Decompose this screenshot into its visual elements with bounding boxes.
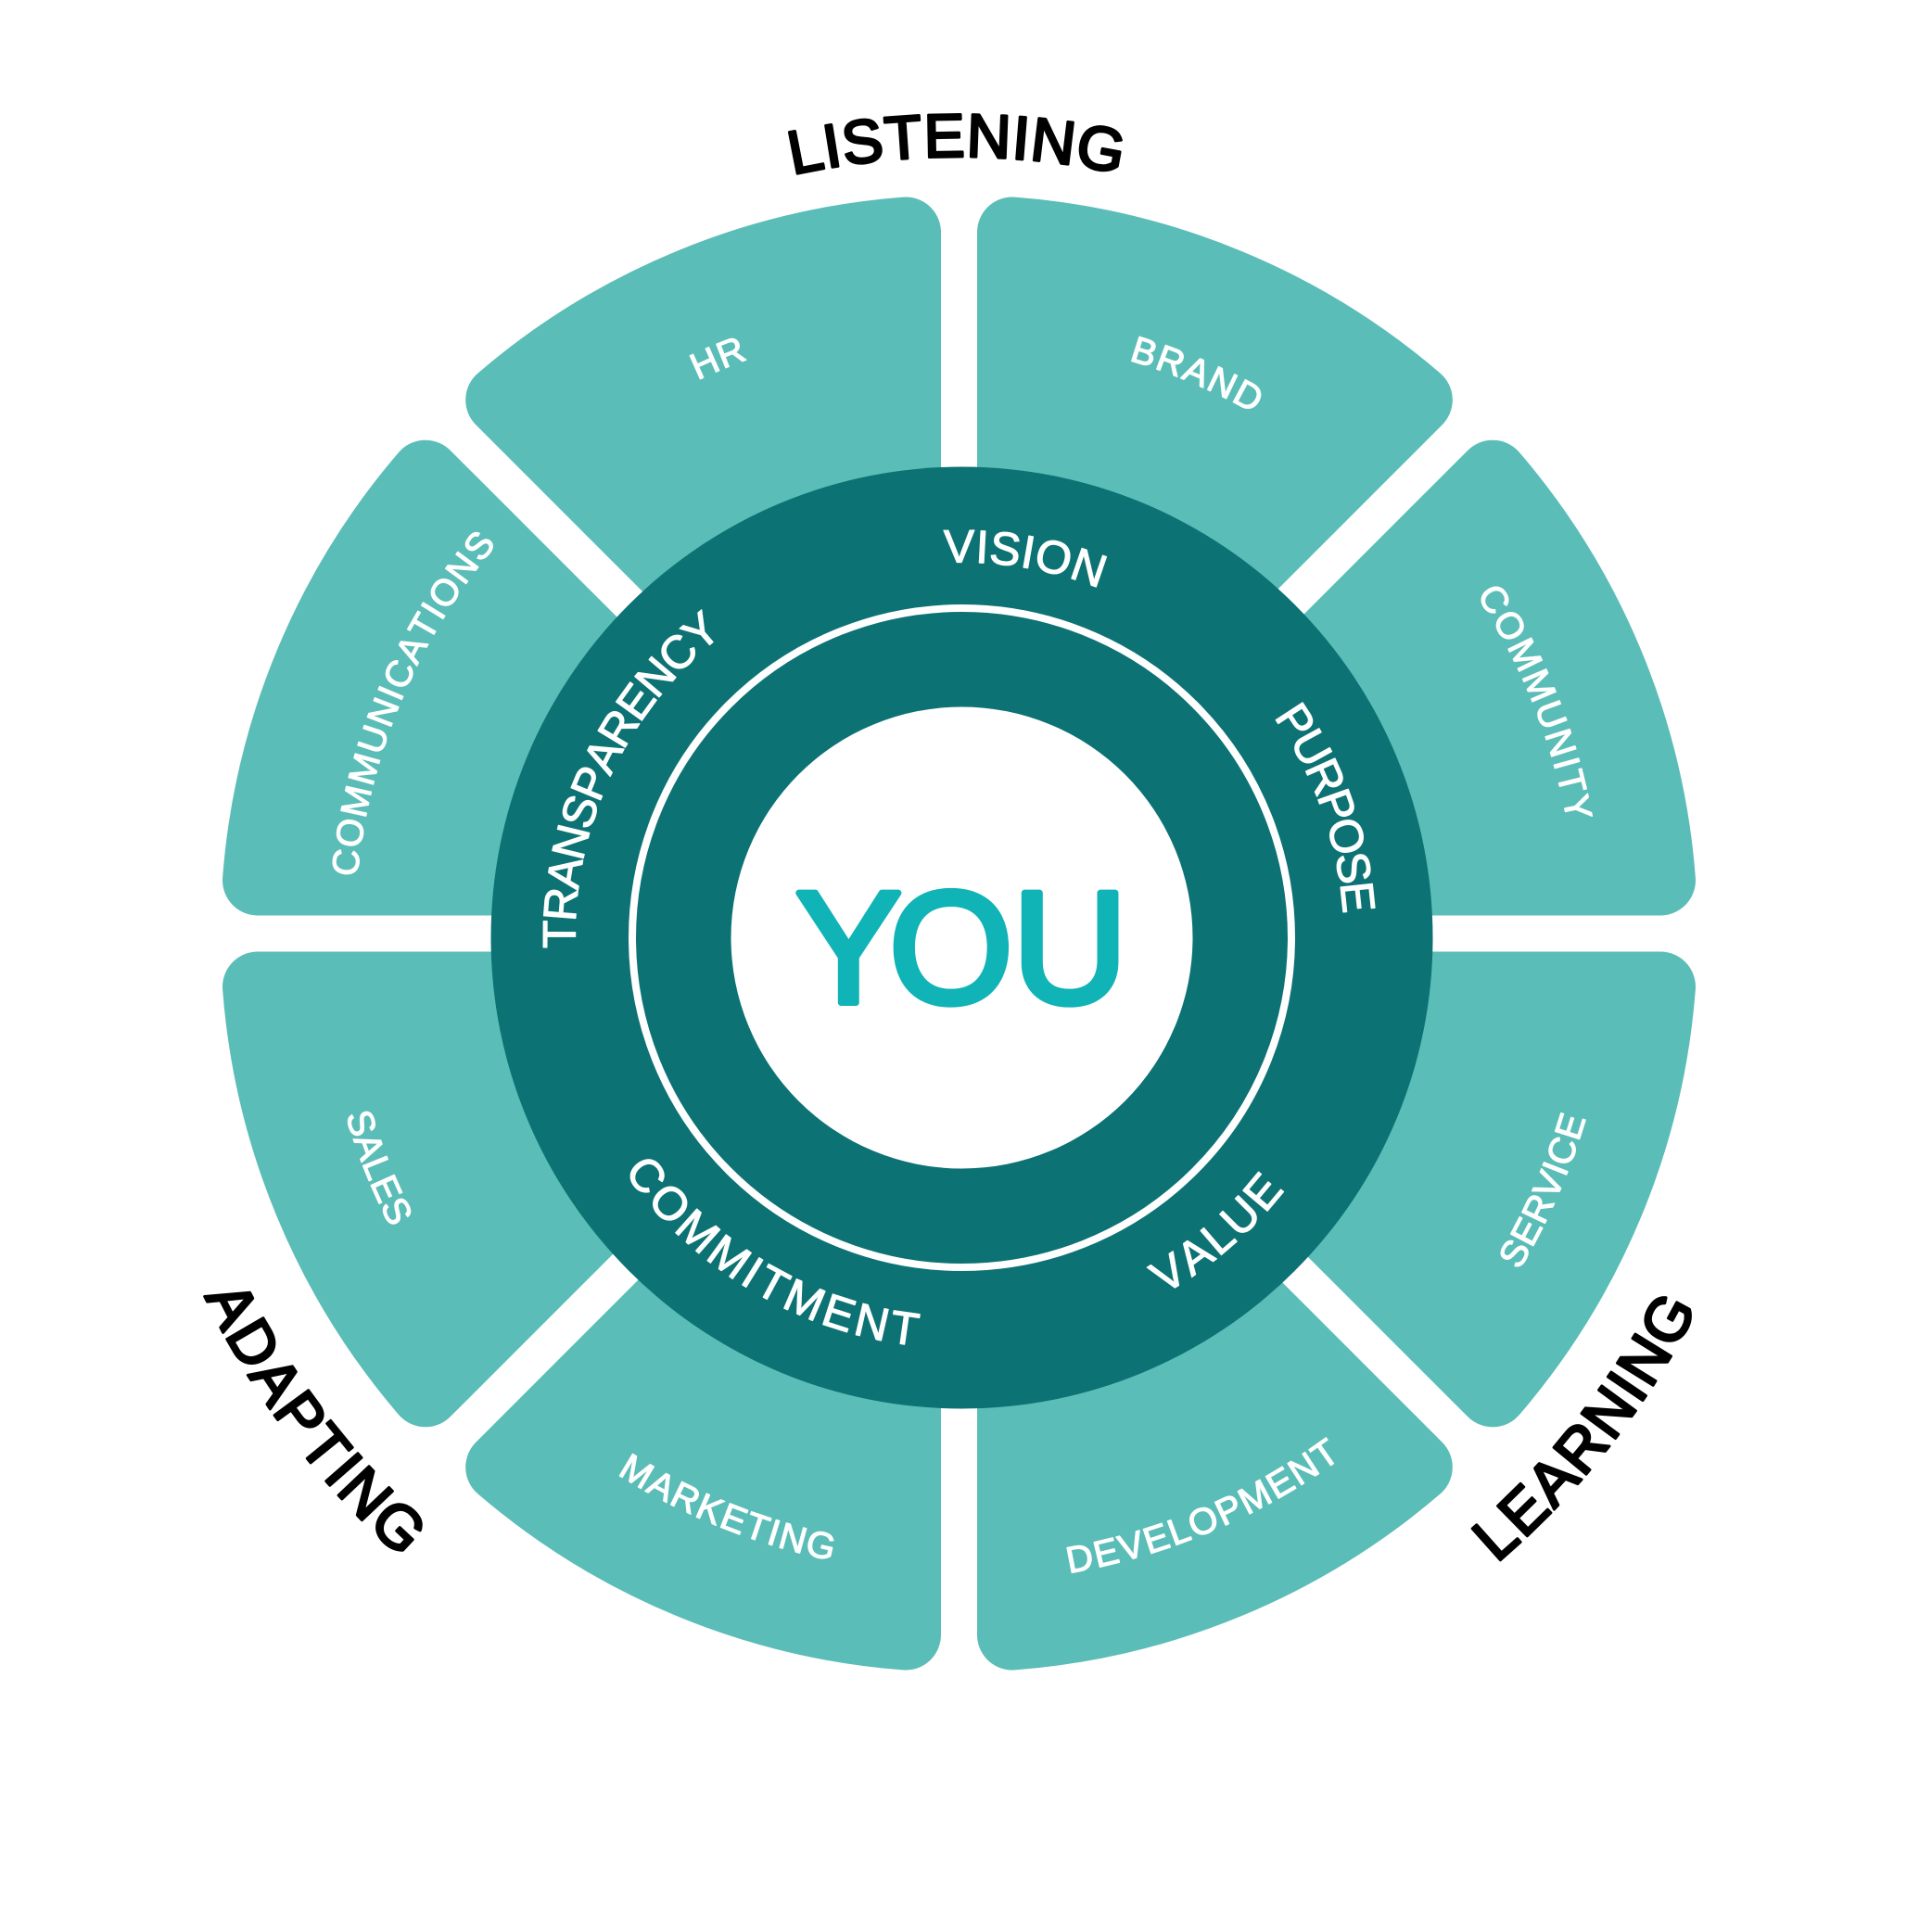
label: DEVELOPMENT: DEVELOPMENT — [1066, 1437, 1335, 1574]
panel: brand — [1012, 232, 1417, 805]
ring label: PURPOSE: PURPOSE — [1276, 702, 1376, 912]
outer wheel segments — [258, 232, 1660, 1635]
label: SALES — [347, 1111, 412, 1225]
centre label: YOU: YOU — [795, 858, 1127, 1036]
ring label: COMMITMENT: COMMITMENT — [630, 1159, 921, 1345]
panel: community — [1087, 476, 1660, 881]
white ring line — [632, 608, 1291, 1267]
label: HR: HR — [690, 337, 747, 380]
centre white circle — [731, 706, 1192, 1168]
label: BRAND: BRAND — [1131, 336, 1261, 409]
heading: LISTENING: LISTENING — [788, 113, 1123, 175]
panel: communications — [258, 476, 831, 881]
label: SERVICE: SERVICE — [1500, 1112, 1586, 1266]
panel: development — [1012, 1062, 1417, 1635]
panel: service — [1087, 986, 1660, 1392]
label: COMMUNITY: COMMUNITY — [1481, 586, 1593, 817]
label: COMMUNICATIONS: COMMUNICATIONS — [332, 532, 493, 875]
label: SALES: SALES — [347, 1111, 412, 1225]
heading: LEARNING: LEARNING — [1470, 1296, 1692, 1561]
ring label: VALUE: VALUE — [1146, 1172, 1285, 1289]
panel: hr — [501, 232, 906, 805]
dark values ring — [491, 467, 1433, 1409]
label: HR — [690, 337, 747, 380]
heading: ADAPTING: ADAPTING — [203, 1290, 423, 1552]
heading: LISTENING — [788, 113, 1123, 175]
ring label: TRANSPARENCY: TRANSPARENCY — [543, 609, 714, 947]
ring label: VISION: VISION — [943, 529, 1107, 588]
panel: marketing — [501, 1062, 906, 1635]
label: MARKETING: MARKETING — [619, 1454, 834, 1559]
panel: sales — [258, 986, 831, 1392]
